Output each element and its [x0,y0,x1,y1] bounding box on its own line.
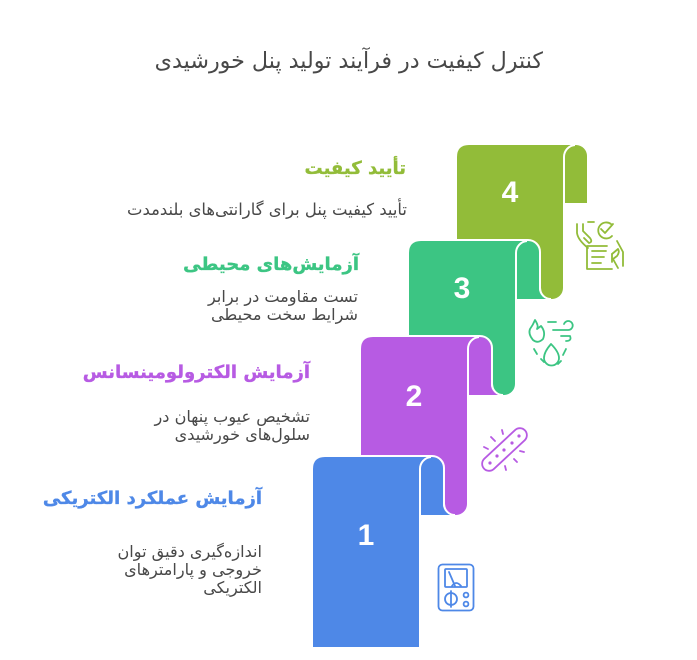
text: step 1: اندازه‌گیری دقیق توان [117,542,262,561]
step 3 ribbon: 3 [454,272,470,305]
step 1 ribbon: 1 [358,519,374,552]
icon: solar cell strip with sparks [479,425,530,474]
heading: step 1: آزمایش عملکرد الکتریکی [43,488,262,509]
step 4 ribbon: 4 [502,176,519,209]
heading: step 3: آزمایش‌های محیطی [183,254,359,275]
text: step 1 [117,542,262,597]
step 4 ribbon [457,145,587,299]
heading: step 2: آزمایش الکترولومینسانس [83,362,310,383]
title: کنترل کیفیت در فرآیند تولید پنل خورشیدی [155,48,543,74]
icon: fire, water and wind [529,320,573,366]
icon: multimeter [438,564,474,610]
text: step 3 [207,287,358,324]
text: step 3: شرایط سخت محیطی [211,305,358,324]
text: step 1: خروجی و پارامترهای [124,560,262,579]
text: step 2 [154,407,310,444]
text: step 4: تأیید کیفیت پنل برای گارانتی‌های بلندمدت [127,200,407,219]
text: step 2: سلول‌های خورشیدی [175,425,310,444]
step 1 ribbon [313,456,455,647]
step 2 ribbon: 2 [406,380,422,413]
step 2 ribbon [361,336,503,515]
icon: quality document with hands and check [577,222,623,269]
heading: step 4: تأیید کیفیت [305,158,406,179]
text: step 2: تشخیص عیوب پنهان در [155,407,310,426]
step 3 ribbon [409,240,551,395]
text: step 1: الکتریکی [203,578,262,597]
text: step 3: تست مقاومت در برابر [208,287,358,306]
